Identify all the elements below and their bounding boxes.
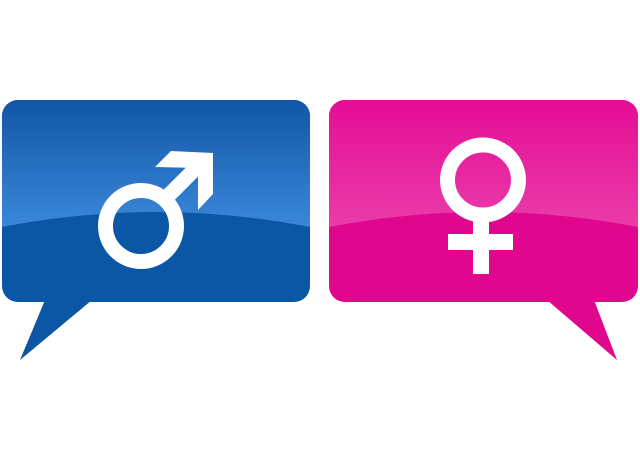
icon: female symbol xyxy=(448,145,518,274)
icon: male symbol xyxy=(106,151,213,262)
panel: female speech bubble xyxy=(329,100,638,360)
panel: male speech bubble xyxy=(2,100,310,360)
